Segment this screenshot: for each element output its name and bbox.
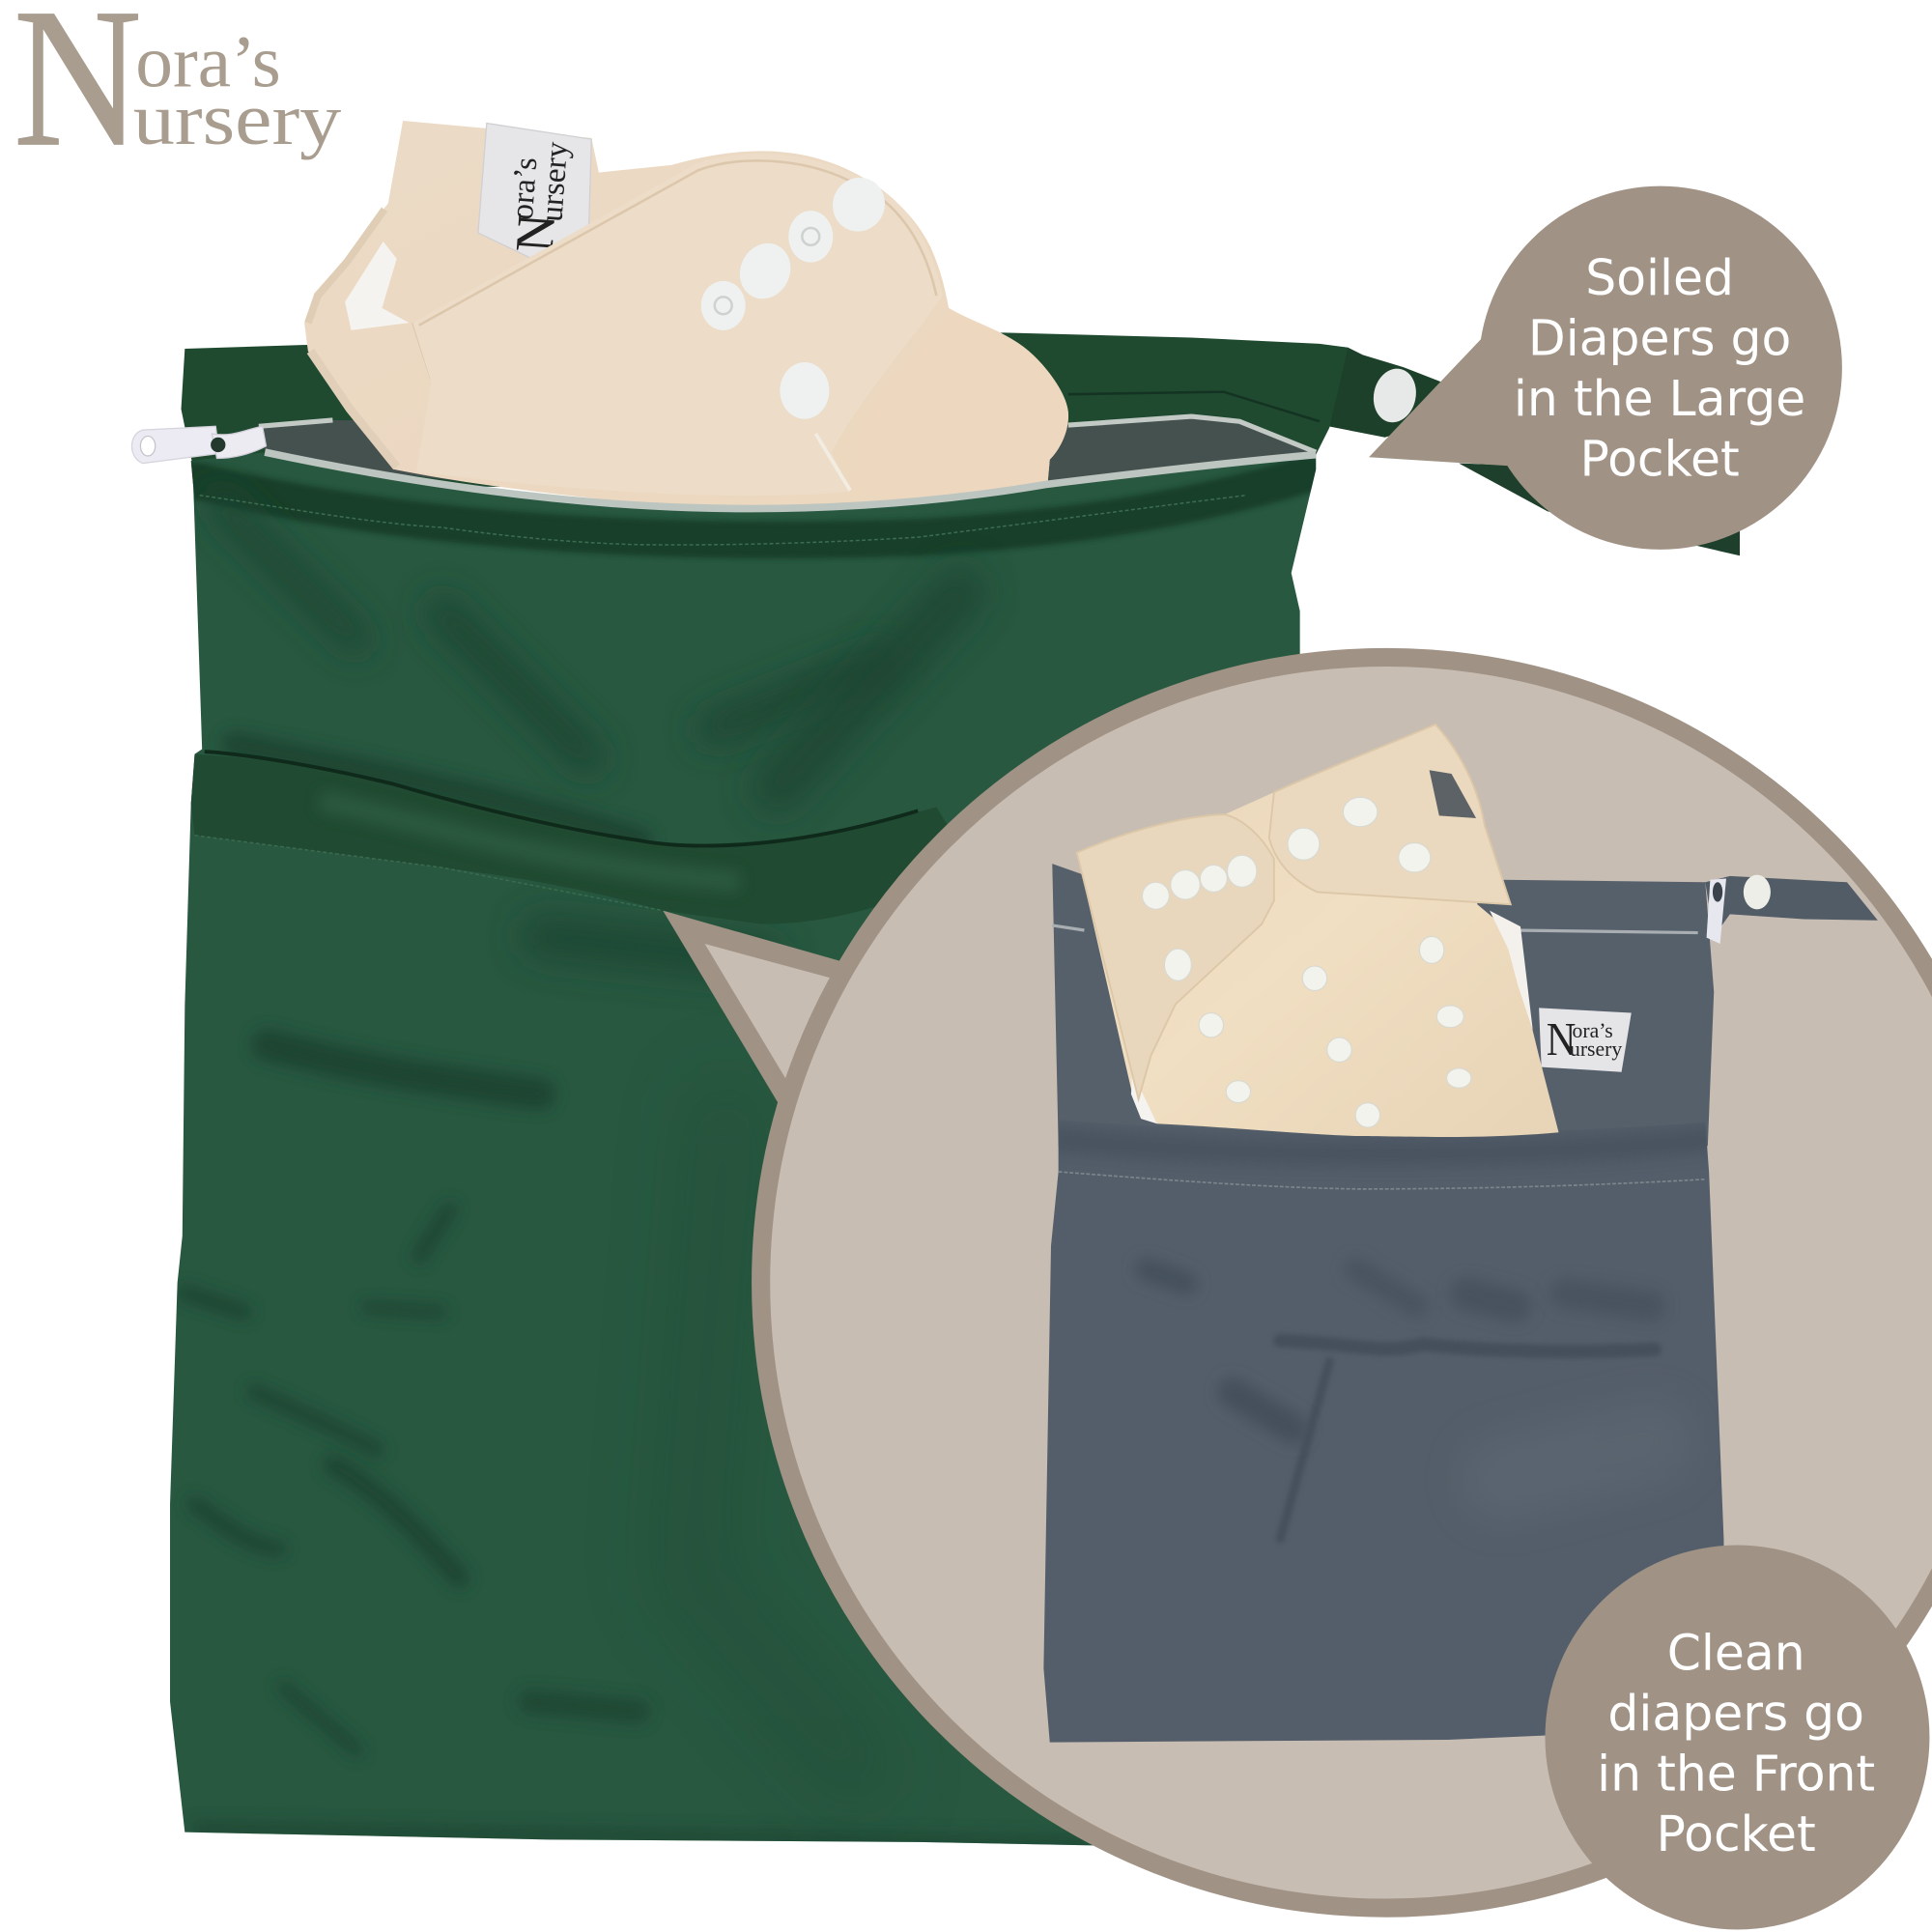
callout pointer (663, 911, 863, 1104)
speech bubble: large pocket (1369, 186, 1842, 550)
speech bubble: front pocket: Clean (1667, 1624, 1805, 1681)
pocket band (191, 754, 985, 924)
logo: ora’s (135, 20, 281, 102)
brand label (478, 124, 591, 259)
back panel (182, 332, 1348, 487)
seam (412, 323, 431, 380)
green wet bag (170, 332, 1740, 1846)
pocket stitching (195, 836, 663, 911)
grey stitching (1059, 1172, 1707, 1189)
inset circle (761, 657, 1932, 1908)
grey back panel (1052, 864, 1714, 1146)
speech bubble: large pocket: Soiled (1585, 249, 1734, 306)
speech bubble: front pocket (1545, 1545, 1929, 1929)
inset lining (1490, 911, 1533, 1030)
grey inner label (1539, 1008, 1632, 1072)
bag tab with snap (1306, 344, 1466, 438)
bag front body (170, 452, 1316, 1846)
speech bubble: front pocket: in the Front (1597, 1745, 1875, 1802)
zipper stitching (200, 496, 1246, 545)
inset callout: clean diapers (663, 657, 1932, 1908)
brand label: ursery (533, 140, 575, 223)
logo: ursery (133, 78, 341, 160)
inset mini label (1430, 770, 1476, 818)
lower bag tab (1459, 464, 1740, 555)
grey front pocket (1043, 1120, 1725, 1743)
piping (815, 434, 850, 491)
zip pull (1707, 878, 1726, 944)
bag opening (261, 416, 1316, 508)
logo (14, 0, 341, 187)
inset flap (1077, 814, 1274, 1099)
speech bubble: front pocket: diapers go (1607, 1685, 1864, 1742)
inset waist tab (1269, 724, 1511, 904)
inset snaps (1142, 797, 1471, 1127)
speech bubble: large pocket: Diapers go (1528, 309, 1791, 366)
grey inner label: N (1547, 1014, 1576, 1065)
snaps (701, 169, 894, 419)
front flap (412, 154, 943, 496)
speech bubble: large pocket: Pocket (1579, 430, 1740, 487)
upper zipper (259, 416, 1316, 452)
diaper in large pocket (304, 121, 1068, 509)
brand label: N (505, 212, 567, 255)
inset diaper (1077, 724, 1559, 1137)
pocket crease (205, 752, 918, 846)
back panel stitching (1068, 392, 1320, 421)
grey wet bag (1043, 864, 1878, 1743)
speech bubble: front pocket: Pocket (1657, 1805, 1816, 1862)
grey zipper (1052, 925, 1698, 933)
side lobe (850, 308, 1068, 498)
lining (345, 242, 409, 330)
front zipper and pull (131, 426, 1316, 509)
speech bubble: large pocket: in the Large (1514, 370, 1805, 427)
band highlight (321, 801, 739, 882)
grey fabric folds (1062, 1140, 1705, 1539)
fabric folds (185, 474, 1306, 1843)
brand label: ora’s (504, 156, 544, 221)
grey inner label: ursery (1570, 1037, 1622, 1061)
grey inner label: ora’s (1573, 1019, 1613, 1042)
elastic edge (310, 352, 397, 467)
grey bag tab (1705, 876, 1878, 936)
